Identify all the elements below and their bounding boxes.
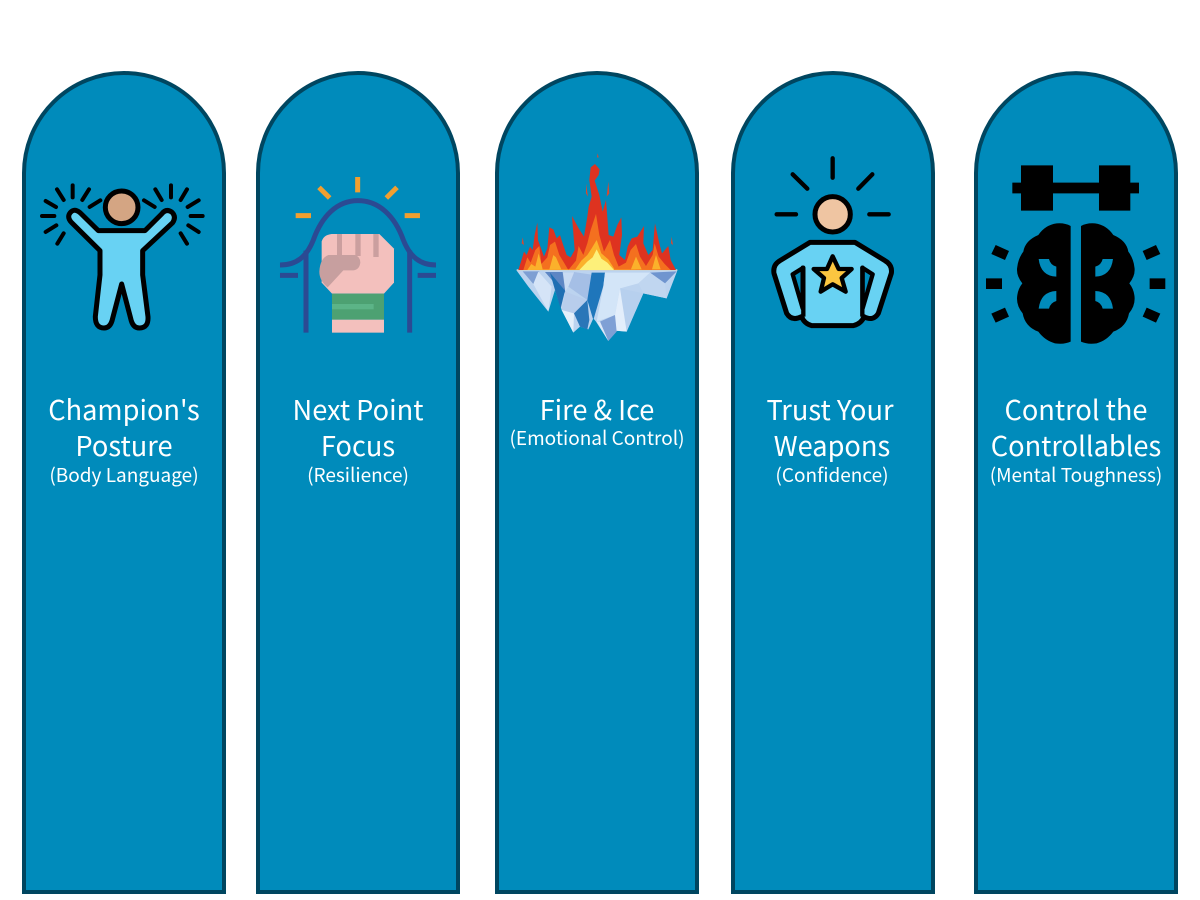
title: Next Point Focus: Next Point bbox=[293, 388, 423, 428]
panel shape 1 bbox=[24, 73, 224, 892]
title line 2: Weapons bbox=[774, 424, 890, 464]
subtitle: Body Language: (Body Language) bbox=[49, 461, 199, 488]
subtitle: Emotional Control: (Emotional Control) bbox=[509, 424, 685, 451]
title: Fire & Ice: Fire & Ice bbox=[540, 388, 654, 428]
title: Control the Controllables: Control the bbox=[1004, 388, 1148, 428]
panel: Champion's Posture bbox=[24, 73, 224, 892]
panel: Trust Your Weapons bbox=[733, 73, 933, 892]
icon: person with raised arms bbox=[42, 185, 203, 328]
title: Trust Your Weapons: Trust Your bbox=[766, 388, 894, 428]
title line 2: Posture bbox=[75, 424, 173, 464]
panel: Fire & Ice bbox=[497, 73, 697, 892]
title line 2: Focus bbox=[321, 424, 395, 464]
title: Champion's Posture: Champion's bbox=[48, 388, 200, 428]
icon: dumbbell and brain bbox=[986, 165, 1165, 344]
title line 2: Controllables bbox=[991, 424, 1161, 464]
panel: Next Point Focus bbox=[258, 73, 458, 892]
panel shape 4 bbox=[733, 73, 933, 892]
panel: Control the Controllables bbox=[976, 73, 1176, 892]
subtitle: Resilience: (Resilience) bbox=[307, 461, 409, 488]
flame sparks bbox=[522, 153, 673, 245]
subtitle: Confidence: (Confidence) bbox=[775, 461, 889, 488]
subtitle: Mental Toughness: (Mental Toughness) bbox=[990, 461, 1162, 488]
icon: confident person with star bbox=[774, 158, 892, 326]
panel shape 5 bbox=[976, 73, 1176, 892]
panel shape 3 bbox=[497, 73, 697, 892]
icon: fist under arc bbox=[280, 177, 436, 333]
icon: fire on floating ice bbox=[517, 153, 677, 341]
panel shape 2 bbox=[258, 73, 458, 892]
